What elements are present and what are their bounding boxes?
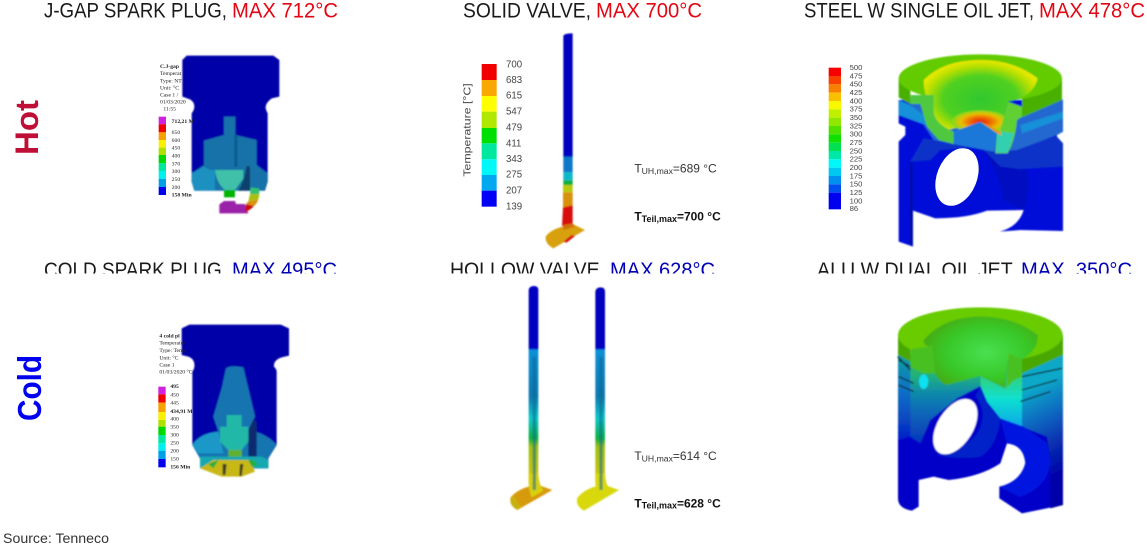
row label: Hot: Hot <box>9 100 45 155</box>
legend: steel piston scale: 175 <box>850 171 862 180</box>
legend: steel piston scale: 200 <box>850 163 862 172</box>
legend: cold spark plug: 434,91 M <box>170 409 193 415</box>
legend: hot spark plug: 400 <box>172 154 180 160</box>
legend: hot spark plug: 450 <box>172 146 180 152</box>
legend: cold spark plug: 4 cold pl <box>159 333 180 339</box>
title: steel with single oil jet: STEEL W SINGLE OIL JET, <box>804 0 1034 22</box>
source note: Source: Tenneco <box>3 530 109 546</box>
title: J-gap spark plug <box>44 0 338 22</box>
title: solid valve: SOLID VALVE, <box>463 0 591 22</box>
annotation: TUH max 614: UH,max <box>642 453 674 463</box>
panel: solid valve simulation <box>462 33 721 248</box>
annotation: TTeil max 628: Teil,max <box>642 501 677 511</box>
legend: steel piston scale: 350 <box>850 113 862 122</box>
legend: cold spark plug: 350 <box>170 425 179 431</box>
legend: hot spark plug: Type: NT <box>160 78 182 84</box>
legend: temperature scale: 479 <box>506 122 522 133</box>
legend: steel piston scale: 100 <box>850 196 862 205</box>
legend: steel piston scale: 300 <box>850 130 862 139</box>
title: aluminium with dual oil jet: ALU W DUAL OIL JET, <box>817 259 1016 282</box>
legend: hot spark plug: 158 Min <box>172 193 192 199</box>
legend: temperature scale: 683 <box>506 75 522 86</box>
legend: hot spark plug: 11:55 <box>163 106 176 112</box>
legend: temperature scale: Temperature [°C] <box>462 83 473 177</box>
legend: cold spark plug: 200 <box>170 448 179 454</box>
legend: cold spark plug: 156 Min <box>170 465 191 471</box>
legend: cold spark plug: 01/03/2020 °C <box>159 368 193 375</box>
legend: steel piston scale: 86 <box>850 204 858 213</box>
legend: hot spark plug: Case 1 / <box>160 93 179 99</box>
legend: steel piston scale: 425 <box>850 88 862 97</box>
legend: cold spark plug: 250 <box>170 440 179 446</box>
legend: temperature scale: 275 <box>506 170 522 181</box>
legend: steel piston scale: 125 <box>850 188 862 197</box>
annotation: TUH max 614: =614 °C <box>673 449 717 463</box>
panel: hot spark plug simulation <box>159 56 279 213</box>
legend: cold spark plug: 445 <box>170 400 179 406</box>
legend: steel piston scale: 375 <box>850 105 862 114</box>
title: cold spark plug: MAX 495°C <box>232 259 337 282</box>
legend: hot spark plug: C.J-gap <box>160 64 179 70</box>
legend: hot spark plug: 300 <box>172 169 180 175</box>
legend: temperature scale <box>462 59 522 212</box>
annotation: TTeil max 700: =700 °C <box>677 210 721 224</box>
annotation: TUH max 689: UH,max <box>642 166 674 176</box>
legend: cold spark plug: 300 <box>170 433 179 439</box>
title: hollow valve: MAX 628°C <box>610 259 715 282</box>
legend: hot spark plug: 650 <box>172 130 180 136</box>
aluminium piston model <box>898 307 1063 513</box>
row label: Cold: Cold <box>11 355 48 421</box>
legend: steel piston scale: 450 <box>850 80 862 89</box>
panel: hollow valve simulation <box>510 286 721 511</box>
title: cold spark plug <box>44 262 336 274</box>
legend: cold spark plug: 495 <box>170 384 179 390</box>
legend: temperature scale: 343 <box>506 154 522 165</box>
legend: cold spark plug: Temperatur <box>159 341 185 347</box>
legend: temperature scale: 139 <box>506 201 522 212</box>
hollow valve model, right <box>577 287 619 511</box>
legend: cold spark plug: 400 <box>170 417 179 423</box>
legend: steel piston scale: 250 <box>850 146 862 155</box>
hollow valve model, left <box>510 286 552 510</box>
legend: hot spark plug: 250 <box>172 177 180 183</box>
annotation: TTeil max 628: =628 °C <box>677 496 721 510</box>
legend: hot spark plug: Unit: °C <box>160 84 179 91</box>
title: hollow valve <box>452 262 714 274</box>
legend: steel piston scale: 400 <box>850 96 862 105</box>
legend: hot spark plug: 370 <box>172 162 180 168</box>
annotation: TUH max 689: T <box>634 162 642 176</box>
annotation: TTeil max 700: T <box>634 210 642 224</box>
steel piston model <box>899 54 1063 247</box>
legend: steel piston scale: 500 <box>850 63 862 72</box>
legend: hot spark plug <box>159 64 195 199</box>
title: cold spark plug: COLD SPARK PLUG, <box>44 259 227 282</box>
spark plug cross-section, cold <box>182 325 289 477</box>
legend: cold spark plug: Case 1 <box>159 362 175 368</box>
panel: cold spark plug simulation <box>158 325 289 477</box>
legend: steel piston scale <box>829 63 862 213</box>
legend: steel piston scale: 475 <box>850 71 862 80</box>
spark plug cross-section, hot <box>182 56 279 213</box>
legend: cold spark plug: 150 <box>170 456 179 462</box>
title: hollow valve: HOLLOW VALVE, <box>450 259 605 282</box>
title: solid valve: MAX 700°C <box>596 0 702 22</box>
legend: temperature scale: 547 <box>506 107 522 118</box>
annotation: TTeil max 700: Teil,max <box>642 214 677 224</box>
legend: steel piston scale: 225 <box>850 155 862 164</box>
legend: cold spark plug <box>158 333 193 471</box>
legend: temperature scale: 700 <box>506 59 522 70</box>
annotation: TUH max 614: T <box>634 449 642 463</box>
legend: cold spark plug: 450 <box>170 392 179 398</box>
solid valve model <box>546 33 585 248</box>
legend: hot spark plug: 600 <box>172 138 180 144</box>
annotation: TTeil max 628: T <box>634 496 642 510</box>
legend: cold spark plug: Unit: °C <box>159 354 179 361</box>
panel: aluminium piston simulation <box>898 307 1063 513</box>
legend: steel piston scale: 275 <box>850 138 862 147</box>
title: aluminium with dual oil jet: MAX. 350°C <box>1021 259 1132 282</box>
legend: hot spark plug: 712,21 M <box>172 119 195 125</box>
legend: hot spark plug: 01/03/2020 <box>160 99 186 105</box>
steel piston pin bore <box>927 142 987 212</box>
legend: temperature scale: 207 <box>506 186 522 197</box>
title: J-gap spark plug: J-GAP SPARK PLUG, <box>44 0 227 22</box>
legend: steel piston scale: 150 <box>850 180 862 189</box>
legend: hot spark plug: 200 <box>172 185 180 191</box>
title: aluminium with dual oil jet <box>818 262 1132 274</box>
legend: steel piston scale: 325 <box>850 121 862 130</box>
legend: hot spark plug: Temperat <box>160 71 182 77</box>
panel: steel piston simulation <box>829 54 1063 247</box>
annotation: TUH max 689: =689 °C <box>673 162 717 176</box>
legend: cold spark plug: Type: Temp <box>159 348 186 354</box>
title: J-gap spark plug: MAX 712°C <box>232 0 338 22</box>
legend: temperature scale: 615 <box>506 91 522 102</box>
title: solid valve <box>463 0 702 22</box>
legend: temperature scale: 411 <box>506 138 521 149</box>
